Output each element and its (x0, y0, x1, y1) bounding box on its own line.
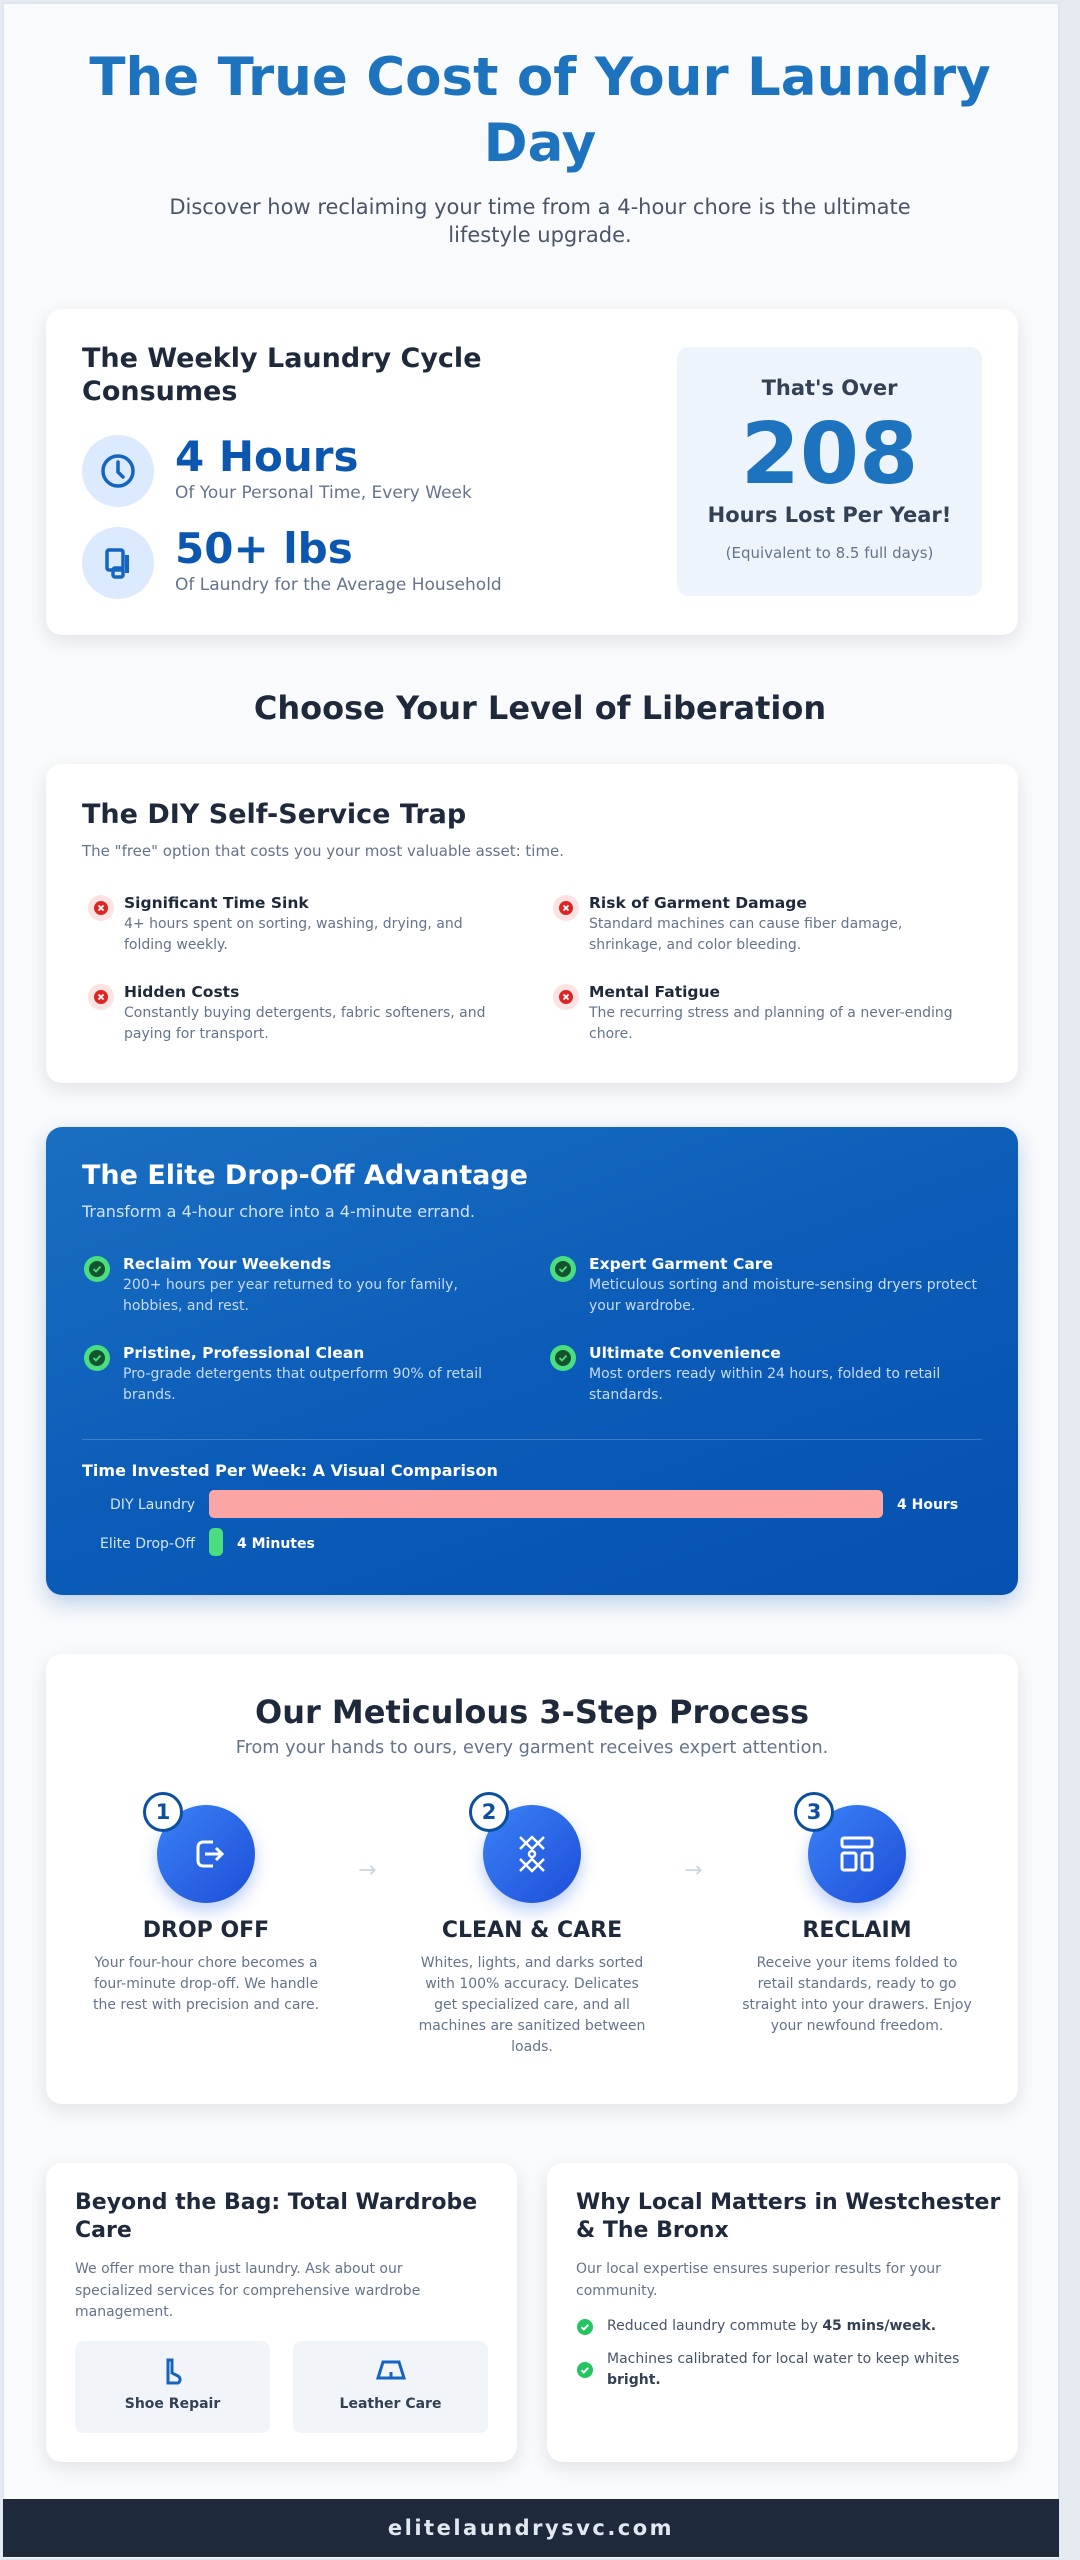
badge 2 (469, 1792, 509, 1832)
tile: leather care: Leather Care (340, 2396, 441, 2412)
item: garment damage: shrinkage, and color bleeding. (589, 937, 801, 953)
step 1: DROP OFF (143, 1918, 269, 1943)
badge 3 (794, 1792, 834, 1832)
panel: DIY trap (46, 764, 1018, 1083)
bar chart: time comparison (82, 1461, 958, 1556)
subheading: The "free" option that costs you your most valuable asset: time. (82, 842, 564, 860)
section heading: Choose Your Level of Liberation (254, 689, 826, 727)
heading: The Weekly Laundry Cycle (82, 343, 482, 374)
subheading: From your hands to ours, every garment receives expert attention. (236, 1738, 828, 1758)
badge 3: 3 (807, 1800, 821, 1824)
item: convenience: Most orders ready within 24 hours, folded to retail (589, 1366, 940, 1382)
badge 1 (143, 1792, 183, 1832)
item: commute: Reduced laundry commute by 45 mins/week. (607, 2318, 936, 2334)
item: mental fatigue: Mental Fatigue (589, 983, 720, 1001)
stat: 4 hours: 4 Hours (175, 432, 358, 481)
subtitle: Discover how reclaiming your time from a 4-hour chore is the ultimate (169, 195, 911, 219)
item: convenience: Ultimate Convenience (589, 1344, 781, 1362)
panel: elite advantage (46, 1127, 1018, 1595)
tile: leather care (293, 2341, 488, 2433)
step 2: CLEAN & CARE (442, 1918, 622, 1943)
item: time sink (88, 894, 463, 953)
icon: reclaim (808, 1805, 906, 1903)
step 2: Whites, lights, and darks sorted with 100% accuracy. Delicates get specialized care, and all machines are sanitized between loads. (419, 1955, 645, 2055)
tile: shoe repair (75, 2341, 270, 2433)
badge 1: 1 (156, 1800, 170, 1824)
heading: & The Bronx (576, 2218, 729, 2243)
step 1 (93, 1792, 319, 2013)
item: garment damage: Risk of Garment Damage (589, 894, 807, 912)
callout: 208 hours: That's Over (762, 376, 897, 400)
icon: x (553, 984, 579, 1010)
callout: 208 hours: (Equivalent to 8.5 full days) (726, 544, 933, 562)
item: weekends: Reclaim Your Weekends (123, 1255, 331, 1273)
icon: check (577, 2319, 593, 2335)
step 1: Your four-hour chore becomes a four-minute drop-off. We handle the rest with precision and care. (93, 1955, 319, 2013)
item: garment care: your wardrobe. (589, 1298, 695, 1314)
heading: Our Meticulous 3-Step Process (255, 1693, 809, 1731)
heading: Beyond the Bag: Total Wardrobe (75, 2190, 477, 2215)
item: hidden costs (88, 983, 485, 1042)
icon: x (553, 895, 579, 921)
stat: 50 lbs: 50+ lbs (175, 524, 353, 573)
subtitle (169, 195, 911, 247)
item: mental fatigue: The recurring stress and planning of a never-ending (589, 1005, 953, 1021)
title: Day (484, 113, 596, 174)
item: weekends: hobbies, and rest. (123, 1298, 249, 1314)
item: garment care: Meticulous sorting and moisture-sensing dryers protect (589, 1277, 977, 1293)
icon: leather (376, 2360, 406, 2380)
panel: 3-step process (46, 1654, 1018, 2104)
step 3: RECLAIM (802, 1918, 912, 1943)
item: garment care (550, 1255, 977, 1314)
stat: 50 lbs (82, 524, 502, 599)
arrow: → (358, 1858, 376, 1883)
bar chart: time comparison: Elite Drop-Off (100, 1536, 195, 1552)
subtitle: lifestyle upgrade. (448, 223, 632, 247)
callout: 208 hours (677, 347, 982, 596)
item: pristine clean: Pro-grade detergents that outperform 90% of retail (123, 1366, 482, 1382)
heading: The DIY Self-Service Trap (82, 799, 466, 830)
item: time sink: Significant Time Sink (124, 894, 309, 912)
item: hidden costs: Hidden Costs (124, 983, 239, 1001)
icon: drop off (157, 1805, 255, 1903)
item: garment damage: Standard machines can cause fiber damage, (589, 916, 902, 932)
item: convenience: standards. (589, 1387, 663, 1403)
item: time sink: 4+ hours spent on sorting, washing, drying, and (124, 916, 463, 932)
stat: 50 lbs: Of Laundry for the Average Household (175, 575, 502, 595)
title (89, 47, 991, 174)
item: pristine clean: Pristine, Professional Clean (123, 1344, 364, 1362)
item: garment damage (553, 894, 902, 953)
callout: 208 hours: Hours Lost Per Year! (708, 503, 951, 527)
item: convenience (550, 1344, 940, 1403)
heading (576, 2190, 1000, 2243)
step 2 (419, 1792, 645, 2055)
item: pristine clean: brands. (123, 1387, 176, 1403)
icon: clean (483, 1805, 581, 1903)
stat: 4 hours: Of Your Personal Time, Every Week (175, 483, 472, 503)
item: pristine clean (84, 1344, 482, 1403)
item: hidden costs: Constantly buying detergents, fabric softeners, and (124, 1005, 485, 1021)
item: mental fatigue (553, 983, 953, 1042)
bar chart: time comparison: 4 Hours (897, 1497, 958, 1513)
step 3: Receive your items folded to retail standards, ready to go straight into your drawers. Enjoy your newfound freedom. (742, 1955, 972, 2034)
footer: elitelaundrysvc.com (388, 2516, 674, 2540)
heading (75, 2190, 477, 2243)
icon: laundry (82, 527, 154, 599)
item: time sink: folding weekly. (124, 937, 228, 953)
icon: clock (82, 435, 154, 507)
item: weekends (84, 1255, 458, 1314)
heading: Care (75, 2218, 132, 2243)
step 3 (742, 1792, 972, 2034)
heading: The Elite Drop-Off Advantage (82, 1160, 528, 1191)
stat: 4 hours (82, 432, 472, 507)
bar chart: time comparison: Time Invested Per Week: A Visual Comparison (82, 1461, 498, 1480)
text: Our local expertise ensures superior results for your community. (576, 2261, 941, 2298)
item: hidden costs: paying for transport. (124, 1026, 269, 1042)
bar chart: time comparison: 4 Minutes (237, 1536, 315, 1552)
icon: check (84, 1345, 110, 1371)
item: mental fatigue: chore. (589, 1026, 633, 1042)
subheading: Transform a 4-hour chore into a 4-minute errand. (82, 1202, 475, 1221)
icon: check (84, 1256, 110, 1282)
icon: check (550, 1345, 576, 1371)
tile: shoe repair: Shoe Repair (125, 2396, 220, 2412)
icon: x (88, 984, 114, 1010)
item: water: Machines calibrated for local water to keep whites bright. (607, 2351, 959, 2388)
panel: local matters (547, 2163, 1018, 2462)
title: The True Cost of Your Laundry (89, 47, 991, 108)
panel: wardrobe care (46, 2163, 517, 2462)
text: We offer more than just laundry. Ask about our specialized services for comprehensive wardrobe management. (75, 2261, 420, 2320)
heading (82, 343, 482, 407)
footer (3, 2499, 1059, 2557)
callout: 208 hours: 208 (741, 405, 918, 504)
item: garment care: Expert Garment Care (589, 1255, 773, 1273)
bar chart: time comparison: DIY Laundry (110, 1497, 195, 1513)
arrow: → (684, 1858, 702, 1883)
icon: x (88, 895, 114, 921)
icon: shoe (166, 2358, 182, 2384)
heading: Consumes (82, 376, 237, 407)
badge 2: 2 (482, 1800, 496, 1824)
heading: Why Local Matters in Westchester (576, 2190, 1000, 2215)
item: weekends: 200+ hours per year returned to you for family, (123, 1277, 458, 1293)
panel: weekly cycle stats (46, 309, 1018, 635)
icon: check (577, 2362, 593, 2378)
icon: check (550, 1256, 576, 1282)
